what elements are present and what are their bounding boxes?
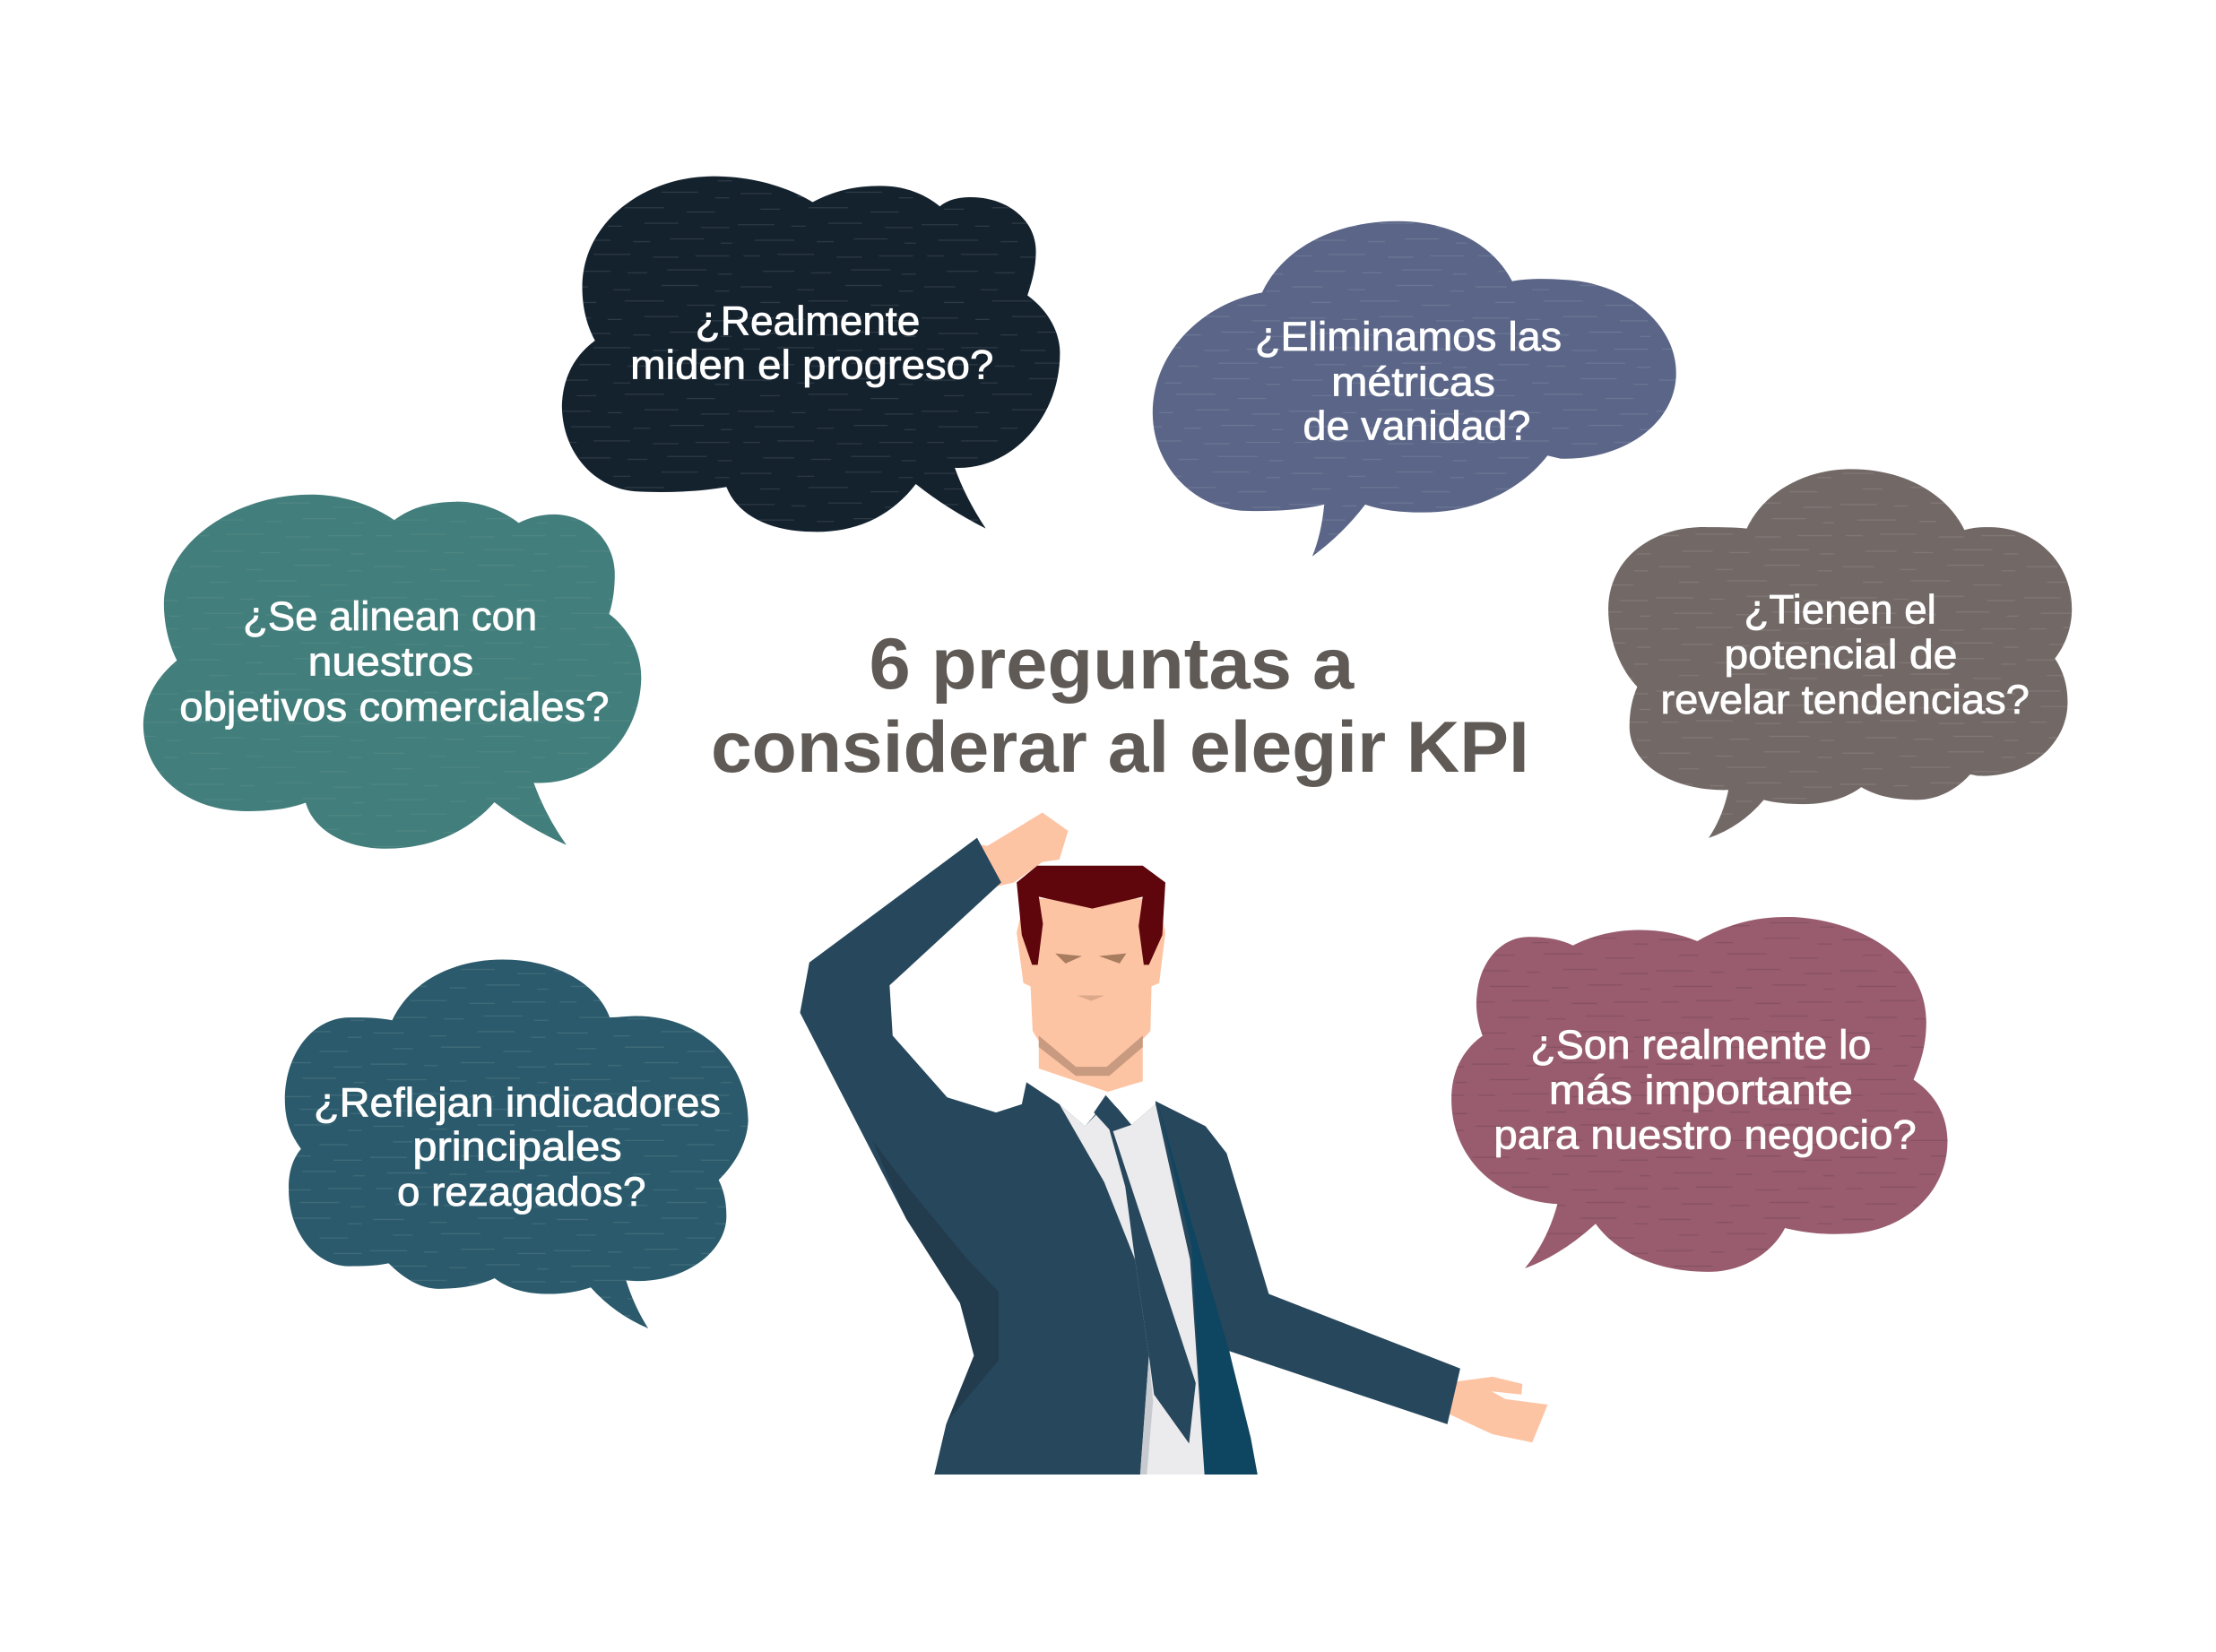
- bubble text: de vanidad?: [1303, 402, 1530, 448]
- bubble text: [1255, 314, 1562, 448]
- bubble text: miden el progreso?: [630, 342, 993, 388]
- collar: [1026, 1068, 1156, 1126]
- bubble text: ¿Reflejan indicadores: [314, 1079, 721, 1125]
- bubble text: ¿Eliminamos las: [1255, 314, 1562, 359]
- bubble text: [179, 593, 609, 730]
- speech bubble: realmente miden el progreso: [562, 177, 1060, 532]
- bubble text: [1493, 1022, 1917, 1158]
- bubble text: [314, 1079, 721, 1215]
- bubble text: ¿Se alinean con: [243, 593, 537, 639]
- shirt: [1060, 1104, 1205, 1475]
- neck and face: [1017, 898, 1165, 1092]
- raised hand: [975, 813, 1069, 887]
- bubble shape: [562, 177, 1060, 532]
- bubble shape: [143, 495, 641, 849]
- title: 6 preguntas a: [870, 624, 1355, 705]
- bubble text: [630, 298, 993, 388]
- bubble text: principales: [412, 1123, 622, 1169]
- bubble shape: [1608, 469, 2072, 838]
- businessman illustration: [800, 813, 1547, 1475]
- tie: [1094, 1095, 1196, 1443]
- shirt fold: [1140, 1355, 1153, 1475]
- jacket right lapel panel: [1158, 1104, 1258, 1475]
- bubble shape: [285, 959, 749, 1328]
- bubble text: ¿Son realmente lo: [1530, 1022, 1871, 1068]
- jacket: [800, 838, 1460, 1475]
- bubble text: ¿Tienen el: [1744, 586, 1936, 632]
- speech bubble: potencial de revelar tendencias: [1608, 469, 2072, 838]
- bubble shape: [1451, 917, 1947, 1272]
- bubble text: ¿Realmente: [696, 298, 920, 344]
- lower hand: [1446, 1377, 1547, 1442]
- bubble text: objetivos comerciales?: [179, 684, 609, 730]
- neck shadow: [1039, 1035, 1143, 1076]
- bubble text: o rezagados?: [397, 1169, 645, 1215]
- speech bubble: se alinean con objetivos comerciales: [143, 495, 641, 849]
- speech bubble: reflejan indicadores principales o rezagados: [285, 959, 749, 1328]
- right eye: [1099, 954, 1126, 964]
- mouth: [1077, 996, 1104, 1001]
- bubble text: para nuestro negocio?: [1493, 1112, 1917, 1158]
- left eye: [1055, 954, 1082, 964]
- title: [711, 624, 1529, 788]
- hair: [1017, 866, 1165, 964]
- bubble text: potencial de: [1724, 632, 1957, 678]
- bubble text: revelar tendencias?: [1660, 677, 2030, 722]
- bubble text: más importante: [1549, 1067, 1853, 1112]
- title: considerar al elegir KPI: [711, 707, 1529, 788]
- bubble text: [1660, 586, 2030, 722]
- bubble shape: [1153, 221, 1676, 557]
- jacket shadow: [872, 1141, 999, 1422]
- bubble text: métricas: [1331, 359, 1495, 404]
- bubble text: nuestros: [308, 639, 473, 685]
- speech bubble: lo más importante para nuestro negocio: [1451, 917, 1947, 1272]
- speech bubble: eliminamos las métricas de vanidad: [1153, 221, 1676, 557]
